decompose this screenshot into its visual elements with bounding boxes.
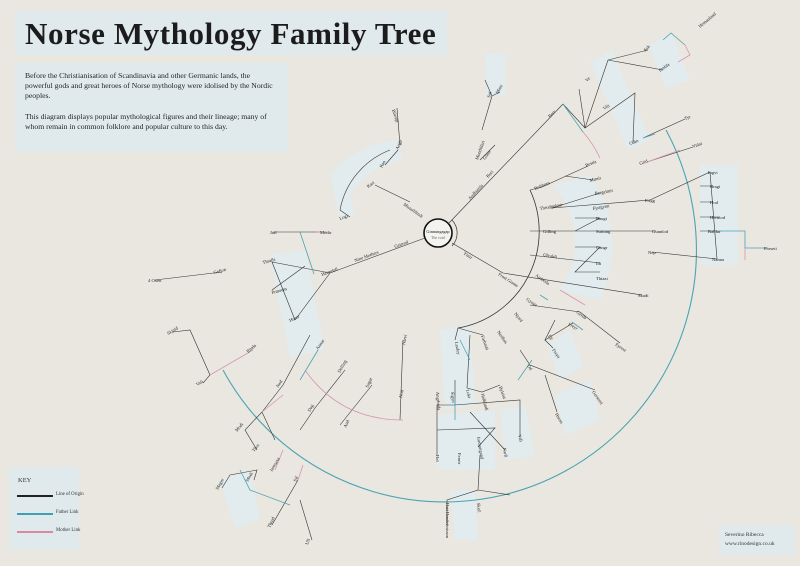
center circle: Ginnungagap xyxy=(424,219,457,247)
family tree diagram: Angrboda xyxy=(435,392,442,410)
family tree diagram: 4 Oxen xyxy=(148,278,162,283)
family tree diagram: Nerthus xyxy=(496,330,509,345)
family tree diagram: Od xyxy=(526,364,534,372)
family tree diagram: Thiazi xyxy=(596,276,608,281)
family tree diagram: Sol xyxy=(486,90,493,98)
key: Mother Link xyxy=(56,528,80,533)
intro text xyxy=(15,63,288,152)
family tree diagram: Annar xyxy=(315,338,326,351)
family tree diagram: Thor xyxy=(251,442,261,453)
family tree diagram: Aud xyxy=(342,419,351,428)
family tree diagram: Nine Mothers xyxy=(354,249,379,263)
family tree diagram: Fenrir xyxy=(457,453,462,465)
family tree diagram: Olvaldi xyxy=(543,252,558,260)
family tree diagram: Thrud xyxy=(266,515,276,528)
family tree diagram: Kari xyxy=(366,180,376,189)
family tree diagram: Mani xyxy=(495,83,504,94)
family tree diagram: Gunnlod xyxy=(652,229,669,234)
family tree diagram: Skjold xyxy=(166,325,179,336)
family tree diagram: Vili xyxy=(602,103,611,111)
credit: www.rinodesign.co.uk xyxy=(725,541,775,547)
key: KEY xyxy=(18,477,31,484)
family tree diagram: Farbauti xyxy=(480,335,490,351)
credit xyxy=(719,525,795,555)
family tree diagram: Logi xyxy=(339,213,349,221)
family tree diagram: Jarnsaxa xyxy=(269,456,281,472)
family tree diagram: Fjr xyxy=(547,334,555,341)
family tree diagram: Frigg xyxy=(645,198,656,203)
family tree diagram: Modi xyxy=(245,471,254,482)
family tree diagram: Vidar xyxy=(692,141,703,149)
family tree diagram: Jormungand xyxy=(476,436,485,460)
family tree diagram: Dag xyxy=(307,403,315,412)
family tree diagram: Hoarr xyxy=(288,314,301,323)
family tree diagram: Idi xyxy=(596,261,602,266)
family tree diagram: Skoll xyxy=(476,503,482,513)
family tree diagram: Rinda xyxy=(245,343,257,354)
family tree diagram: Hemauland xyxy=(697,11,717,29)
family tree diagram: Mimir xyxy=(589,175,602,183)
family tree diagram: Helblindi xyxy=(480,393,490,412)
family tree diagram: Sagat xyxy=(364,376,374,388)
family tree diagram: Narvi xyxy=(401,333,408,345)
intro text: Before the Christianisation of Scandinavia and other Germanic lands, the powerful gods and great heroes of Norse mythology were idolised by the Nordic peoples. xyxy=(25,71,273,100)
family tree diagram: Modir xyxy=(320,230,332,235)
big father arc xyxy=(223,130,696,502)
family tree diagram: Fjorgynn xyxy=(592,203,610,211)
family tree diagram: Nep xyxy=(648,250,656,255)
family tree diagram: Sif xyxy=(292,475,299,482)
family tree diagram: Aurboda xyxy=(534,273,550,286)
key: Line of Origin xyxy=(56,492,84,497)
family tree diagram: Mundilfari xyxy=(474,139,486,160)
family tree diagram: Glaur xyxy=(482,149,492,161)
family tree diagram: Modi xyxy=(234,421,245,433)
family tree diagram: Hati Hrodvitnisson xyxy=(445,503,450,539)
credit: Severino Ribecca xyxy=(725,532,764,538)
family tree diagram: Nanna xyxy=(712,257,724,262)
family tree diagram: Baugi xyxy=(596,216,608,221)
family tree diagram: Baldur xyxy=(708,229,721,234)
family tree diagram: Prassens xyxy=(271,286,288,295)
family tree diagram: Vali xyxy=(517,434,524,443)
center circle: Ginnungagap: Ginnungagap xyxy=(426,229,450,234)
family tree diagram: Ask xyxy=(642,43,651,53)
family tree diagram: Thrudgelmir xyxy=(539,202,564,211)
family tree diagram: Hel xyxy=(435,455,440,462)
family tree diagram: Loki xyxy=(465,389,472,399)
family tree diagram: Freya xyxy=(551,348,561,359)
family tree diagram: Hod xyxy=(710,200,719,205)
family tree diagram: Aegir xyxy=(394,138,404,150)
intro text: This diagram displays popular mythological figures and their lineage; many of whom remain in common folklore and popular culture to this day. xyxy=(25,112,267,131)
family tree diagram: Sigyn xyxy=(450,392,456,403)
family tree diagram: Jord xyxy=(275,379,284,389)
family tree diagram: Jarl xyxy=(270,230,277,235)
family tree diagram: Ymir xyxy=(462,251,474,260)
family tree diagram: Nott xyxy=(398,389,405,398)
family tree diagram: Bragi xyxy=(710,184,721,189)
family tree diagram: Gymir xyxy=(525,297,539,308)
key: Father Link xyxy=(56,510,79,515)
family tree diagram: Tyr xyxy=(684,114,692,121)
family tree diagram: Bestla xyxy=(585,159,597,168)
family tree diagram: Ran xyxy=(379,159,387,168)
family tree diagram: Narfi xyxy=(502,447,509,458)
family tree diagram: Delling xyxy=(337,358,348,374)
family tree diagram: Odin xyxy=(629,138,640,146)
center circle: Ginnungagap: The void xyxy=(431,236,445,240)
family tree diagram: Suttung xyxy=(596,229,611,234)
family tree diagram: Borr xyxy=(547,109,557,119)
family tree diagram: Bileygr xyxy=(391,109,401,124)
family tree diagram: Heimdall xyxy=(321,266,339,277)
family tree diagram: Hermod xyxy=(710,215,726,220)
family tree diagram: Gangr xyxy=(596,245,608,250)
key xyxy=(9,467,79,550)
family tree diagram: Gilling xyxy=(543,229,557,234)
family tree diagram: Grid xyxy=(639,158,649,166)
family tree diagram: Ingvi xyxy=(708,170,718,175)
inner origin arc xyxy=(458,190,539,328)
family tree diagram: Buri xyxy=(485,169,495,179)
family tree diagram: Thralls xyxy=(262,257,276,265)
family tree diagram: Laufey xyxy=(454,341,461,356)
family tree diagram: Ull xyxy=(304,537,311,545)
family tree diagram: Njord xyxy=(513,311,524,323)
family tree diagram: Mistarblindi xyxy=(402,202,424,219)
family tree diagram: Ve xyxy=(584,76,591,83)
title: Norse Mythology Family Tree xyxy=(25,16,436,51)
family tree diagram: Eyeest xyxy=(614,342,628,353)
family tree diagram: Bolthorn xyxy=(534,180,551,191)
family tree diagram: Gefjon xyxy=(213,267,227,275)
family tree diagram: Audhumla xyxy=(467,183,484,201)
family tree diagram: Freyr xyxy=(568,322,579,331)
family tree diagram: Frost Giants xyxy=(497,272,519,288)
family tree diagram: Magni xyxy=(215,477,225,490)
family tree diagram: Embla xyxy=(658,62,670,73)
family tree diagram: Gerda xyxy=(575,310,587,320)
family tree diagram: Vali xyxy=(195,378,205,387)
family tree diagram: Skadi xyxy=(638,293,649,298)
family tree diagram: Byleist xyxy=(498,386,507,400)
family tree diagram: Bergelmir xyxy=(594,188,614,196)
family tree diagram: Hnoss xyxy=(554,412,564,425)
family tree diagram: Geirrod xyxy=(394,239,409,249)
family tree diagram: Gersemi xyxy=(591,390,605,406)
family tree diagram: Forseti xyxy=(764,246,777,251)
